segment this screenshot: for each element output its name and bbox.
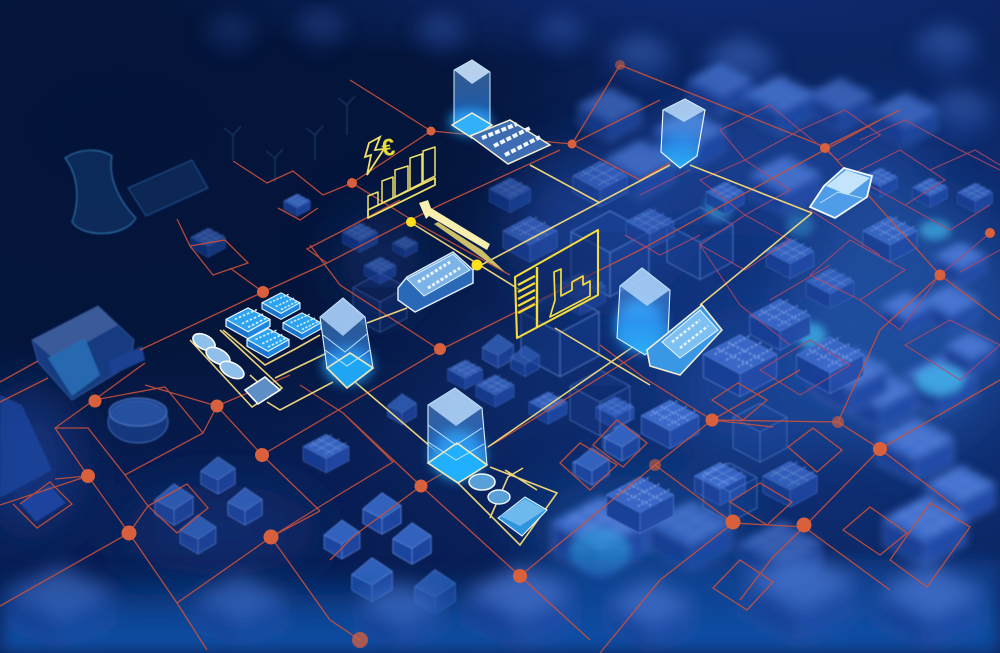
central roof block (398, 252, 473, 312)
flow arrows (419, 200, 505, 272)
block far right (810, 168, 872, 218)
glowing tower B (428, 388, 487, 483)
small units by tower B (469, 474, 547, 536)
power plant building (128, 160, 208, 216)
glowing tower C with roof (616, 268, 722, 375)
pink circuit lines upper right (625, 105, 1000, 395)
white roof cluster (470, 120, 550, 164)
small panels bottom left (20, 485, 66, 522)
bar chart icon (368, 147, 435, 218)
yellow junction dots (406, 217, 482, 270)
gold connection lines (190, 165, 812, 545)
cooling tower (65, 150, 136, 234)
monitor icon (515, 230, 598, 338)
rooftop cluster left (226, 293, 321, 358)
glowing tower A (320, 298, 373, 388)
tower top (450, 60, 492, 138)
left edge building (0, 395, 52, 498)
left side dim plant (0, 96, 455, 614)
storage tank (108, 398, 168, 443)
wind turbines (224, 96, 355, 182)
tower upper right (661, 99, 705, 168)
broad soft blue glow behind city (0, 100, 1000, 585)
euro symbol: € (380, 134, 397, 162)
bottom foreground blur band (0, 553, 1000, 653)
top tower with base and roofs (450, 60, 550, 164)
mid-distance city blocks (342, 161, 993, 534)
white panel row left (190, 330, 280, 404)
lightning bolt icon (365, 137, 384, 175)
factory left (32, 306, 145, 400)
top distant blurred blocks (204, 7, 992, 142)
right background blurred blocks (552, 63, 996, 592)
